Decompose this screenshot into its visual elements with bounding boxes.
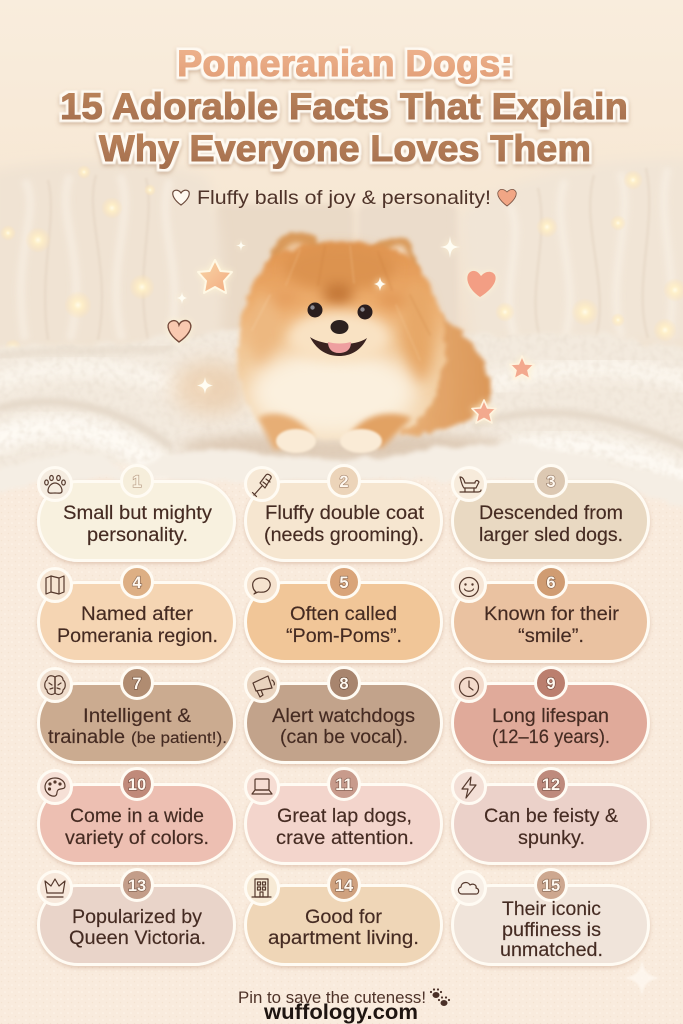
card 8: watchdogs xyxy=(246,668,442,762)
text: Intelligent & xyxy=(83,706,191,727)
blanket xyxy=(0,330,683,505)
faint sparkle bottom right xyxy=(624,960,660,996)
number 14 xyxy=(328,870,360,900)
nose xyxy=(330,320,348,334)
footer call to action: Pin to save the cuteness! xyxy=(238,988,426,1007)
text xyxy=(65,806,209,849)
right ear xyxy=(362,236,417,286)
left fur patch xyxy=(172,362,252,414)
text xyxy=(484,604,620,647)
wool grain xyxy=(0,330,683,505)
left ear xyxy=(271,232,327,278)
text: “smile”. xyxy=(518,626,584,647)
text: Descended from xyxy=(479,503,623,524)
number 11: 11 xyxy=(335,776,353,794)
text: (12–16 years). xyxy=(492,727,610,748)
number 13: 13 xyxy=(128,877,146,895)
title line 3: Why Everyone Loves Them xyxy=(99,128,591,169)
text xyxy=(500,899,603,961)
text: trainable xyxy=(48,727,125,748)
text xyxy=(63,503,213,546)
decoration: sparkles, stars and hearts around the dog xyxy=(168,236,534,423)
number 12 xyxy=(536,768,566,800)
text xyxy=(276,806,414,849)
heart right xyxy=(467,271,496,297)
subtitle with hearts: Fluffy balls of joy & personality! xyxy=(197,187,491,209)
number 8: 8 xyxy=(339,675,349,693)
text xyxy=(492,706,610,748)
icon: clock xyxy=(452,668,486,702)
card 7: intelligent xyxy=(38,668,234,762)
text xyxy=(484,806,618,849)
text: Named after xyxy=(81,604,194,625)
number 3: 3 xyxy=(546,473,556,491)
number 9: 9 xyxy=(546,675,556,693)
card 6: smile xyxy=(452,566,648,662)
star bottom right xyxy=(472,400,496,423)
text: unmatched. xyxy=(500,940,603,961)
left eye xyxy=(308,302,322,318)
card 13: queen victoria xyxy=(38,870,234,964)
number 10 xyxy=(122,768,152,800)
text: Pomerania region. xyxy=(57,626,218,647)
text: “Pom-Poms”. xyxy=(286,626,402,647)
mouth xyxy=(310,337,367,356)
text: Fluffy double coat xyxy=(265,503,425,524)
text: Queen Victoria. xyxy=(69,928,206,949)
number 2: 2 xyxy=(339,473,349,491)
card 10: colors xyxy=(38,768,234,864)
fact cards grid xyxy=(38,466,648,964)
number 5: 5 xyxy=(339,574,349,592)
icon: smiley xyxy=(452,568,486,602)
number 9 xyxy=(536,668,566,698)
text: Often called xyxy=(290,604,397,625)
card 11: lap dogs xyxy=(246,768,442,864)
text: Come in a wide xyxy=(70,806,204,827)
right knit pillow xyxy=(460,159,683,345)
left knit pillow xyxy=(0,161,223,350)
cream chest xyxy=(249,348,417,436)
mane side shading xyxy=(250,246,434,383)
card 5: pom-poms xyxy=(246,566,442,662)
outline heart xyxy=(173,190,189,205)
text xyxy=(264,503,425,546)
text: Long lifespan xyxy=(492,706,609,727)
card 3: sled dogs xyxy=(452,466,648,560)
text xyxy=(48,706,227,748)
number 11 xyxy=(328,768,360,800)
heart left xyxy=(168,321,191,342)
text: personality. xyxy=(87,525,188,546)
text: crave attention. xyxy=(276,828,414,849)
front legs xyxy=(258,414,314,450)
paws xyxy=(276,429,316,453)
card 9: lifespan xyxy=(452,668,648,762)
dog body xyxy=(400,305,492,436)
number 8 xyxy=(328,668,360,698)
number 6: 6 xyxy=(546,574,556,592)
icon: laptop xyxy=(246,770,278,804)
text: spunky. xyxy=(518,828,585,849)
number 2 xyxy=(328,466,360,496)
right eye xyxy=(358,304,372,320)
icon: lightning bolt xyxy=(452,770,486,804)
title line 1: Pomeranian Dogs: xyxy=(177,43,513,84)
text xyxy=(272,706,415,748)
icon: megaphone xyxy=(246,668,278,702)
icon: sled xyxy=(452,468,486,500)
blanket foreground fold xyxy=(0,444,683,510)
icon: brain xyxy=(38,668,72,702)
website watermark: wuffology.com xyxy=(263,1001,418,1024)
text: Good for xyxy=(305,907,383,928)
icon: building xyxy=(246,872,278,904)
text: Alert watchdogs xyxy=(272,706,415,727)
number 13 xyxy=(122,870,152,900)
icon: speech bubble xyxy=(246,568,278,602)
number 6 xyxy=(536,566,566,598)
bokeh lights xyxy=(0,165,683,357)
fur streaks xyxy=(252,246,430,360)
icon: palette xyxy=(38,770,72,804)
icon: crown xyxy=(38,872,72,904)
number 10: 10 xyxy=(128,776,146,794)
number 3 xyxy=(536,466,566,496)
text xyxy=(69,907,206,949)
text: Their iconic xyxy=(502,899,601,920)
number 4 xyxy=(122,566,152,598)
number 12: 12 xyxy=(542,776,560,794)
text: Great lap dogs, xyxy=(277,806,412,827)
card 1: small but mighty xyxy=(38,466,234,560)
pomeranian dog illustration xyxy=(172,232,510,462)
title line 2: 15 Adorable Facts That Explain xyxy=(60,86,628,127)
text xyxy=(268,907,419,949)
text xyxy=(479,503,623,546)
number 7 xyxy=(122,668,152,698)
text: puffiness is xyxy=(502,920,601,941)
number 15: 15 xyxy=(542,877,560,895)
text: larger sled dogs. xyxy=(479,525,623,546)
number 4: 4 xyxy=(132,574,142,592)
text xyxy=(286,604,402,647)
number 7: 7 xyxy=(132,675,142,693)
title xyxy=(60,43,628,169)
text xyxy=(57,604,218,647)
text: variety of colors. xyxy=(65,828,209,849)
filled heart xyxy=(498,189,516,206)
card 2: fluffy coat xyxy=(246,466,442,560)
icon: map xyxy=(38,568,72,602)
star top left xyxy=(198,260,232,293)
text: Popularized by xyxy=(72,907,203,928)
tongue xyxy=(328,342,351,353)
number 5 xyxy=(328,566,360,598)
text: Can be feisty & xyxy=(484,806,618,827)
card 15: puffiness xyxy=(452,870,648,964)
text: apartment living. xyxy=(268,928,419,949)
star right xyxy=(510,356,534,379)
card 12: feisty xyxy=(452,768,648,864)
text: (needs grooming). xyxy=(264,525,424,546)
card 4: pomerania xyxy=(38,566,234,662)
cream muzzle xyxy=(287,311,391,363)
text: Small but mighty xyxy=(63,503,213,524)
icon: paw xyxy=(38,468,72,500)
text: Known for their xyxy=(484,604,620,625)
head and mane xyxy=(237,242,445,440)
number 1: 1 xyxy=(132,473,142,491)
card 14: apartment xyxy=(246,870,442,964)
text: (can be vocal). xyxy=(280,727,408,748)
text: (be patient!). xyxy=(131,730,227,747)
number 1 xyxy=(122,466,152,496)
number 15 xyxy=(536,870,566,900)
icon: brush xyxy=(246,468,278,500)
dog shadow xyxy=(180,432,510,462)
centre cushions xyxy=(214,204,458,334)
four-point sparkles xyxy=(177,236,460,394)
hero scene: cosy bed backdrop xyxy=(0,0,683,360)
icon: paw prints xyxy=(430,988,450,1006)
number 14: 14 xyxy=(335,877,354,895)
icon: cloud xyxy=(452,872,486,904)
